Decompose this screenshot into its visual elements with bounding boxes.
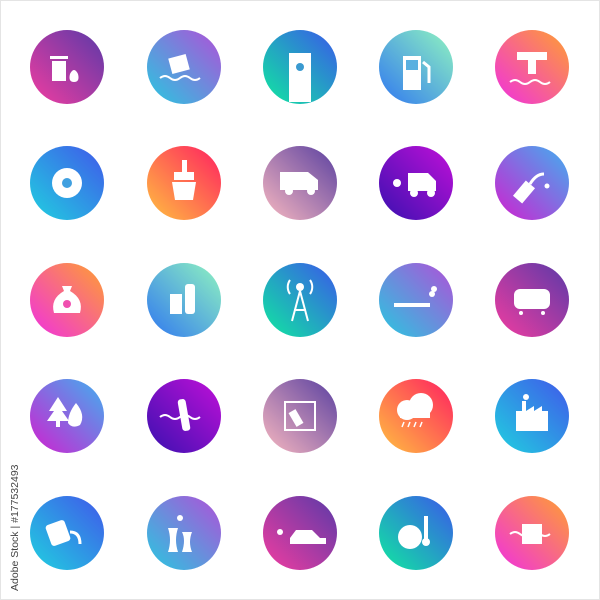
icon: fuel nozzle [495, 146, 569, 220]
icon: truck [379, 146, 453, 220]
icon: van [263, 146, 337, 220]
icon: bottle in water [147, 379, 221, 453]
icon: trash [30, 30, 104, 104]
icon: plastic bag [263, 379, 337, 453]
row 5 [30, 496, 569, 570]
row 3 [30, 263, 569, 337]
icon: tower [263, 263, 337, 337]
icon: plastic bag and bottle [147, 263, 221, 337]
icon: toxic bag [30, 263, 104, 337]
row 2 [30, 146, 569, 220]
icon: nuclear plant [147, 496, 221, 570]
icon: pipe leak [495, 30, 569, 104]
icon: factory [495, 379, 569, 453]
icon: bag in water [495, 496, 569, 570]
row 4 [30, 379, 569, 453]
icon: car exhaust [263, 496, 337, 570]
icon: gas pump [379, 30, 453, 104]
icon: biohazard [30, 146, 104, 220]
icon: oil canister [30, 496, 104, 570]
icon: forest fire [30, 379, 104, 453]
watermark text: Adobe Stock | #177532493 [9, 464, 21, 591]
row 1 [30, 30, 569, 104]
icon: ship [147, 146, 221, 220]
icon: globe thermometer [379, 496, 453, 570]
icon: acid rain cloud [379, 379, 453, 453]
icon: sinking box [147, 30, 221, 104]
icon: tank car [495, 263, 569, 337]
icon: cigarette [379, 263, 453, 337]
icon: barrel [263, 30, 337, 104]
